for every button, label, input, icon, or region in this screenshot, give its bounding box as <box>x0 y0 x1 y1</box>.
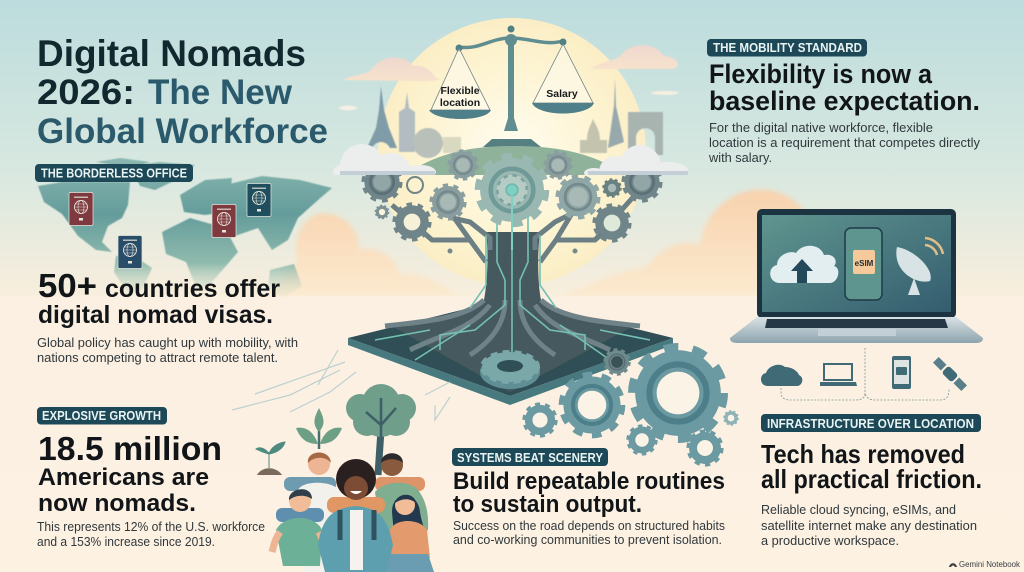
sprout <box>256 442 285 468</box>
body: nations competing to attract remote talent. <box>37 350 278 365</box>
body <box>37 519 265 549</box>
phone icon <box>892 356 911 389</box>
heading: Americans are <box>38 464 209 491</box>
passport <box>69 192 93 226</box>
body: Reliable cloud syncing, eSIMs, and <box>761 502 956 517</box>
tree <box>378 430 381 475</box>
balance scale: Salary <box>546 88 578 100</box>
body: Success on the road depends on structured habits <box>453 518 725 533</box>
title: The New <box>148 72 292 112</box>
tag: SYSTEMS BEAT SCENERY <box>457 451 604 465</box>
heading: to sustain output. <box>453 491 642 518</box>
body <box>708 120 980 165</box>
body <box>37 335 298 365</box>
heading <box>761 439 982 494</box>
body: a productive workspace. <box>761 533 899 548</box>
body <box>761 502 977 548</box>
back right man <box>375 453 428 560</box>
heading: baseline expectation. <box>709 86 980 116</box>
plants <box>256 384 416 475</box>
body <box>453 518 725 547</box>
panel: systems beat scenery <box>452 448 725 547</box>
body: For the digital native workforce, flexible <box>709 120 933 135</box>
cloud icon <box>761 365 802 386</box>
heading: Flexibility is now a <box>709 59 932 89</box>
laptop icon <box>820 363 857 386</box>
capitol <box>580 118 607 153</box>
title: 2026: <box>37 72 135 112</box>
tower right <box>608 78 624 148</box>
circuit tree <box>348 190 673 405</box>
sky clouds <box>339 45 679 110</box>
scale post <box>504 45 518 131</box>
back left man <box>284 452 345 572</box>
tag: INFRASTRUCTURE OVER LOCATION <box>767 417 974 431</box>
green hill <box>405 146 625 175</box>
heading: Build repeatable routines <box>453 468 725 495</box>
heading: all practical friction. <box>761 464 982 494</box>
canopy clouds <box>333 144 688 175</box>
board gears <box>480 350 738 464</box>
peach clouds on the horizon <box>268 190 812 296</box>
city skyline <box>367 78 663 158</box>
heading: 50+ <box>38 267 97 304</box>
body: with salary. <box>708 150 772 165</box>
body: This represents 12% of the U.S. workforce <box>37 519 265 534</box>
gears canopy <box>364 152 660 250</box>
Eiffel tower <box>367 86 397 148</box>
panel: explosive growth <box>37 407 265 549</box>
front right woman <box>386 495 434 572</box>
heading <box>38 430 222 517</box>
body: and co-working communities to prevent isolation. <box>453 532 722 547</box>
balance scale: location <box>440 97 480 109</box>
body: location is a requirement that competes directly <box>709 135 980 150</box>
panel: the borderless office <box>35 164 298 365</box>
title: Digital Nomads <box>37 33 306 74</box>
front left man <box>272 489 325 566</box>
central gear <box>480 158 544 222</box>
scale labels: Flexible <box>440 85 480 97</box>
circuit trails <box>232 350 450 420</box>
title: Global Workforce <box>37 111 328 151</box>
world map <box>38 158 332 298</box>
tag: THE BORDERLESS OFFICE <box>41 166 187 180</box>
laptop screen <box>757 209 956 318</box>
flat gear on board <box>480 355 540 389</box>
continents <box>38 158 332 298</box>
heading: digital nomad visas. <box>38 301 273 329</box>
twig dots <box>448 248 452 254</box>
title <box>37 33 328 151</box>
scale beam <box>459 38 563 47</box>
satellite dish <box>896 247 931 282</box>
tag: THE MOBILITY STANDARD <box>713 41 862 55</box>
heading <box>453 468 725 518</box>
sun <box>378 18 646 286</box>
group of nomads <box>272 452 434 572</box>
trunk <box>395 232 630 392</box>
heading: countries offer <box>105 275 280 303</box>
skyscraper left <box>399 92 415 152</box>
watermark: Gemini Notebook <box>959 559 1021 569</box>
right pan <box>533 44 593 103</box>
infrastructure icons <box>761 348 968 400</box>
tag: EXPLOSIVE GROWTH <box>42 409 161 423</box>
laptop base <box>730 317 983 343</box>
heading: now nomads. <box>38 490 196 517</box>
balance scale <box>429 26 594 147</box>
heading <box>38 267 280 329</box>
arch <box>628 112 663 155</box>
board <box>348 298 673 396</box>
phone eSIM <box>845 228 882 300</box>
roots <box>385 300 640 355</box>
body: satellite internet make any destination <box>761 518 977 533</box>
connecting lines <box>781 348 949 400</box>
heading: 18.5 million <box>38 430 222 467</box>
heading <box>709 59 980 116</box>
body: and a 153% increase since 2019. <box>37 534 215 549</box>
center woman <box>318 459 393 572</box>
circuit traces <box>375 190 650 375</box>
sapling <box>318 420 320 449</box>
satellite icon <box>932 356 968 392</box>
laptop: eSIM <box>855 259 874 268</box>
heading: Tech has removed <box>761 439 965 469</box>
cloud upload icon <box>770 246 838 283</box>
body: Global policy has caught up with mobility, with <box>37 335 298 350</box>
panel: the mobility standard <box>707 39 980 165</box>
branches <box>392 195 635 262</box>
laptop <box>730 209 983 343</box>
panel: infrastructure over location <box>761 414 982 548</box>
left pan <box>431 48 490 110</box>
